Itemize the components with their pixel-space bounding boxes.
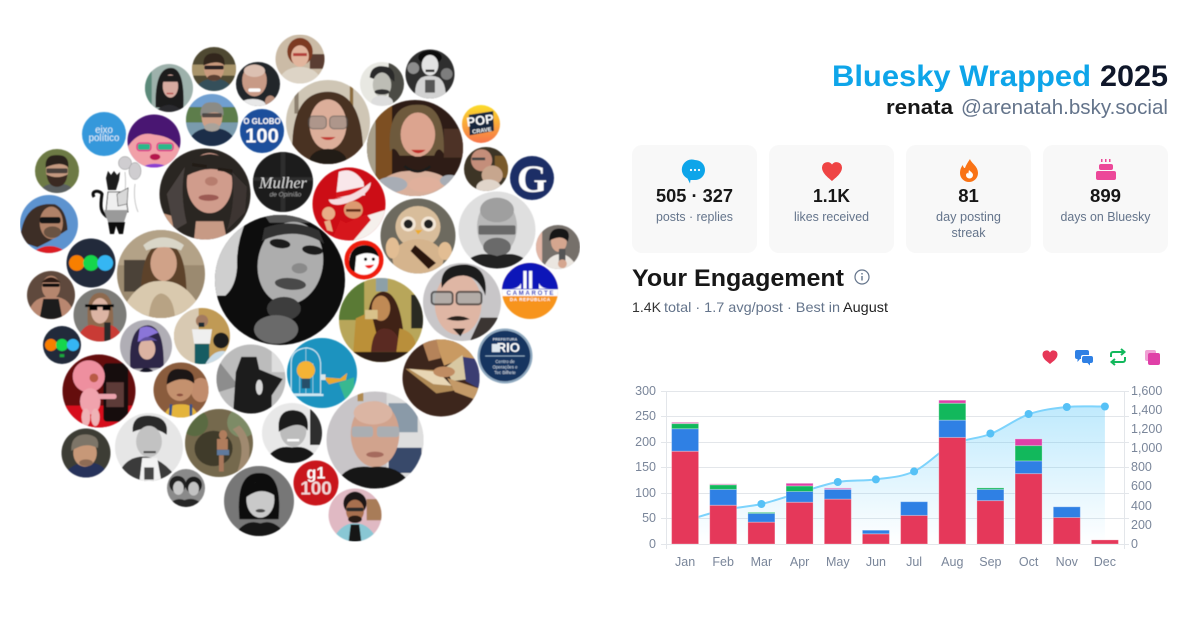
avatar: Guardian G logo: G (517, 158, 547, 201)
user handle: renata (886, 97, 954, 119)
legend icon: likes (1042, 350, 1058, 364)
engagement summary: 1.4K (632, 299, 662, 315)
right axis labels: 800 (1131, 460, 1152, 474)
icon: heart (822, 162, 842, 181)
avatar: Camarote logo (502, 263, 558, 319)
avatar: three dots logo with flag (43, 326, 81, 364)
avatar: logo Prefeitura Rio: Centro de (495, 359, 515, 364)
stat card: streak: streak (952, 226, 986, 240)
avatar: logo Prefeitura Rio: PREFEITURA (493, 338, 518, 342)
engagement chart (635, 384, 1162, 569)
avatar: Pop Crave logo: POP (466, 111, 495, 130)
stat card: posts and replies (632, 145, 757, 253)
left axis labels (635, 384, 656, 551)
icon: info (855, 270, 869, 284)
legend icon: reposts (1111, 349, 1125, 365)
avatar: man with afro and blue shirt (328, 488, 382, 542)
avatar: g1 100 logo: g1 (307, 465, 325, 483)
month labels: Jun (866, 555, 886, 569)
stat card: streak: day posting (936, 210, 1001, 224)
avatar: woman with pixel glasses (74, 288, 126, 342)
cumulative area and line (685, 402, 1109, 544)
avatar: child in yellow tank (154, 362, 211, 418)
avatar: black and white man with jacket (115, 413, 183, 481)
legend icon: quotes (1145, 350, 1160, 365)
title: Bluesky Wrapped (832, 60, 1091, 93)
avatar: cat with balloons drawing (93, 156, 141, 234)
right axis labels: 400 (1131, 499, 1152, 513)
left axis labels: 300 (635, 384, 656, 398)
avatar: asian woman black and white (224, 466, 294, 536)
avatar: speaker with microphone (174, 308, 230, 364)
month labels: Mar (751, 555, 772, 569)
avatar: man in tank top (27, 271, 75, 319)
right axis labels: 1,600 (1131, 384, 1162, 398)
avatar: three dots logo (66, 238, 116, 288)
engagement summary (632, 299, 888, 315)
avatar: man with thick glasses (423, 263, 501, 341)
left axis labels: 0 (649, 537, 656, 551)
avatar: Camarote logo: CAMAROTE (506, 290, 554, 297)
legend (1042, 349, 1160, 366)
title: 2025 (1100, 60, 1168, 93)
avatar: Pop Crave logo (462, 105, 500, 143)
right axis labels: 0 (1131, 537, 1138, 551)
avatar: man mirror selfie (536, 225, 580, 269)
icon: flame (960, 159, 978, 182)
month labels: Jan (675, 555, 695, 569)
engagement summary: total · 1.7 avg/post · Best in (664, 299, 840, 315)
month labels: Aug (941, 555, 963, 569)
avatar: painting of reader with book (402, 340, 480, 416)
user handle: @arenatah.bsky.social (961, 97, 1168, 119)
avatar: O Globo 100 logo: 100 (245, 125, 279, 147)
avatar: lightbulb in cage (287, 338, 357, 408)
avatar: Mulher logo: de Opinião (269, 191, 302, 198)
avatar: woman with glasses and curly hair (286, 80, 370, 172)
stat card: posts and replies: 505 · 327 (656, 185, 733, 206)
avatar: man with sunglasses and long hair (20, 195, 78, 253)
stat card: likes: likes received (794, 210, 869, 224)
avatar: logo Prefeitura Rio: RIO (497, 340, 520, 355)
avatar: cartoon in red ring (344, 240, 384, 280)
avatar: Mulher logo: Mulher (258, 174, 308, 192)
avatar: woman with dark fringe (145, 64, 193, 112)
avatar: woman with red hair (275, 34, 326, 84)
avatar: Camarote logo: DA REPÚBLICA (510, 296, 551, 302)
avatar: logo Prefeitura Rio: Operações e (492, 365, 518, 370)
left axis labels: 200 (635, 435, 656, 449)
right axis labels: 1,400 (1131, 403, 1162, 417)
avatar: Mulher logo (253, 152, 313, 212)
right axis labels: 200 (1131, 518, 1152, 532)
avatar: plush toy with bottle (380, 198, 456, 278)
engagement heading: Your Engagement (632, 265, 844, 292)
stat card: streak (906, 145, 1031, 253)
right axis labels: 1,000 (1131, 441, 1162, 455)
icon: chat bubble (682, 159, 705, 184)
avatar: asian woman selfie (160, 148, 250, 240)
month labels: Sep (979, 555, 1002, 569)
engagement summary: August (843, 299, 888, 315)
stat card: days on Bluesky (1043, 145, 1168, 253)
avatar: Guardian G logo (510, 156, 554, 201)
avatar: bearded man with glasses (35, 149, 79, 201)
legend icon: replies (1075, 350, 1093, 366)
avatar: eixo politico logo: político (89, 133, 119, 144)
month labels: Oct (1019, 555, 1039, 569)
right axis labels: 600 (1131, 479, 1152, 493)
avatar: pink doll (62, 354, 136, 428)
left axis labels: 250 (635, 409, 656, 423)
avatar: bald smiling man (236, 62, 280, 111)
stat card: likes (769, 145, 894, 253)
avatar: black and white smiling woman (406, 50, 454, 98)
stat card: days on Bluesky: days on Bluesky (1060, 210, 1151, 224)
month labels: Apr (790, 555, 809, 569)
avatar: black and white bearded man (360, 62, 404, 110)
avatar: main black and white portrait (215, 215, 345, 345)
stat card: likes: 1.1K (813, 185, 851, 206)
avatar collage (20, 34, 580, 542)
avatar: purple haired woman (120, 320, 172, 372)
right axis labels (1131, 384, 1162, 551)
avatar: black and white bald man (458, 192, 536, 268)
month labels: Feb (712, 555, 734, 569)
avatar: logo Prefeitura Rio (478, 328, 532, 384)
avatar: woman with flower crown (117, 230, 205, 318)
avatar: grey haired man at lake (186, 94, 238, 146)
right axis labels: 1,200 (1131, 422, 1162, 436)
stat card: posts and replies: posts · replies (656, 210, 733, 224)
avatar: purple haired cartoon woman (128, 114, 180, 168)
month labels: May (826, 555, 850, 569)
avatar: black and white shadow (216, 344, 286, 414)
avatar: man in nature (181, 408, 257, 477)
month labels (675, 555, 1116, 569)
avatar: g1 100 logo (294, 460, 338, 506)
avatar: man with glasses (192, 47, 236, 98)
stat card: days on Bluesky: 899 (1090, 185, 1121, 206)
avatar: eixo politico logo (82, 112, 126, 156)
avatar: two men black and white (167, 469, 205, 507)
avatar: Pop Crave logo: CRAVE (472, 127, 492, 136)
month labels: Jul (906, 555, 922, 569)
avatar: logo Prefeitura Rio: Tec Bilhete (494, 370, 516, 375)
avatar: woman drinking, yellow room (339, 278, 423, 362)
avatar: O Globo 100 logo: O GLOBO (243, 117, 281, 126)
avatar: g1 100 logo: 100 (300, 479, 332, 500)
avatar: man with cat (464, 147, 508, 195)
left axis labels: 150 (635, 460, 656, 474)
left axis labels: 100 (635, 486, 656, 500)
stat card: streak: 81 (958, 185, 979, 206)
month labels: Nov (1056, 555, 1079, 569)
left axis labels: 50 (642, 511, 656, 525)
month labels: Dec (1094, 555, 1116, 569)
avatar: woman with red lipstick (367, 100, 463, 196)
avatar: eixo politico logo: eixo (95, 125, 113, 136)
icon: cake (1096, 159, 1116, 180)
avatar: black and white smiling man (262, 403, 322, 463)
stacked monthly bars (672, 400, 1118, 544)
avatar: red hat cartoon man (312, 168, 386, 240)
avatar: O Globo 100 logo (240, 109, 284, 153)
avatar: bald man with clear glasses (326, 392, 424, 488)
avatar: man with dark hoodie (62, 428, 110, 478)
